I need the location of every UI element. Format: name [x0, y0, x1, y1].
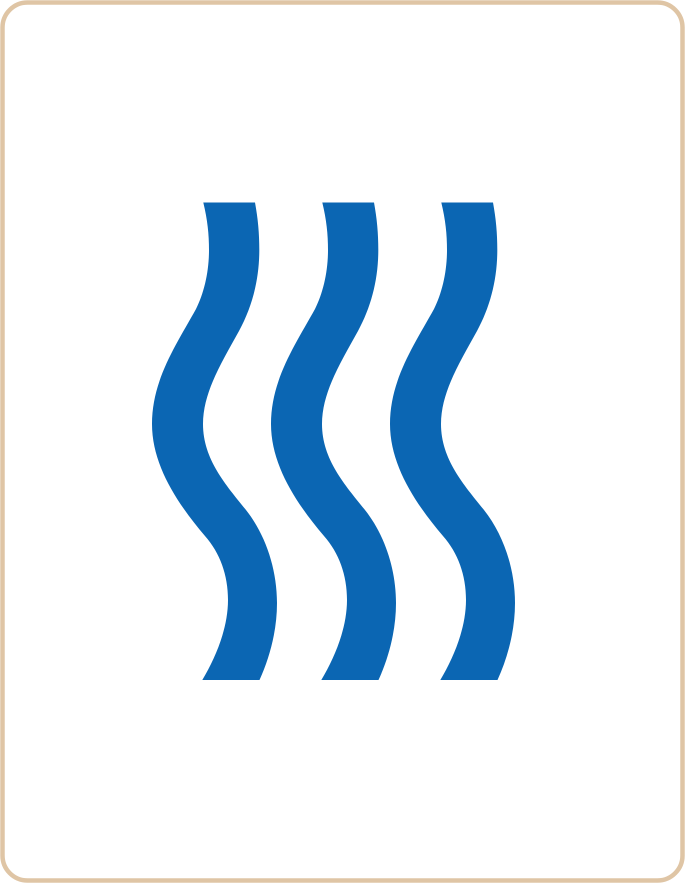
wave 2 [271, 202, 396, 680]
wave 1 [152, 202, 277, 680]
icon: three wavy steam lines [152, 202, 515, 680]
wave 3 [390, 202, 515, 680]
